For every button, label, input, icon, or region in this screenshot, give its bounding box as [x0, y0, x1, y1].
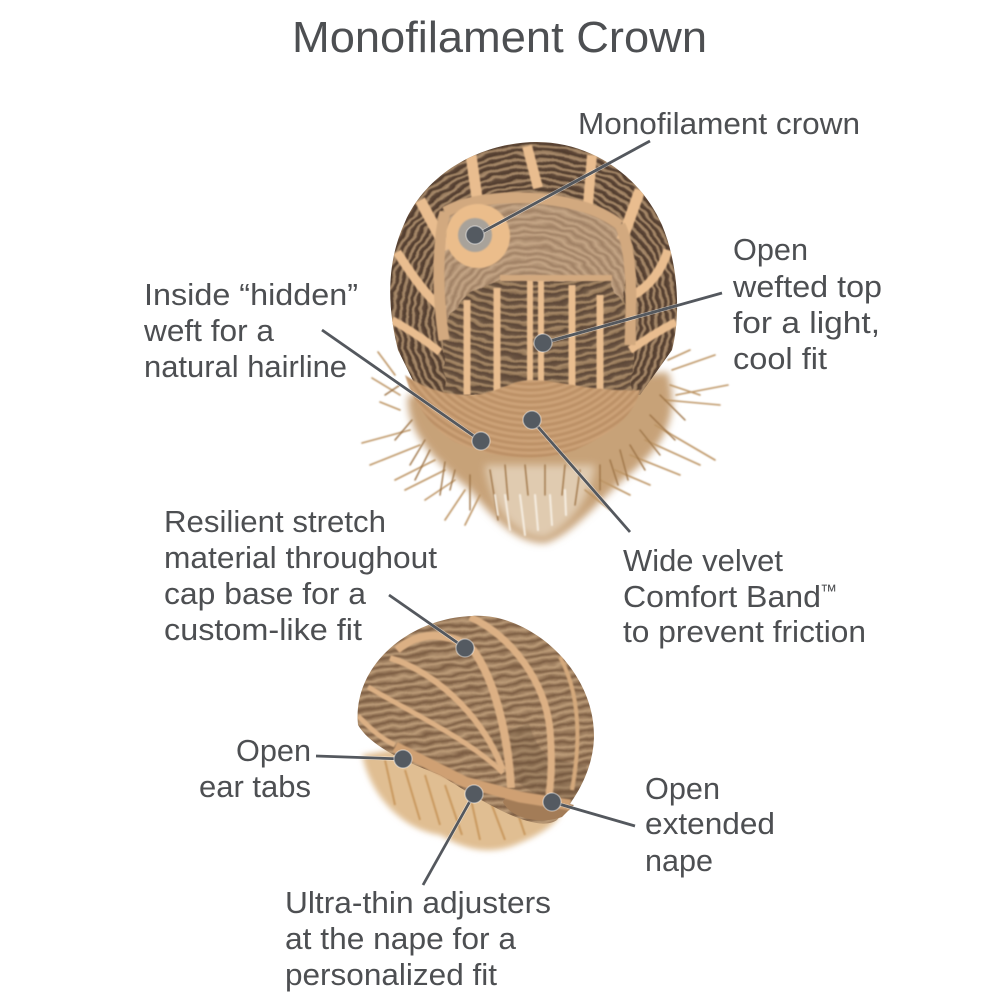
nape band — [395, 747, 570, 805]
label: extended nape: nape — [645, 844, 713, 878]
straps: upper wig — [392, 146, 676, 395]
label: comfort band: to prevent friction — [623, 615, 866, 649]
label: open wefted top: Open — [733, 233, 808, 267]
label: open wefted top: for a light, — [733, 306, 880, 340]
title: Monofilament Crown — [292, 13, 707, 62]
label: stretch material: material throughout — [164, 541, 438, 575]
wig: back view — [348, 606, 604, 850]
label: stretch material — [164, 505, 438, 647]
cap wefts: lower wig — [358, 616, 594, 824]
label: open wefted top — [732, 233, 882, 376]
comfort band — [405, 375, 640, 458]
crown lace panel — [436, 196, 629, 335]
label: ear tabs: Open — [236, 734, 311, 768]
label: adjusters: Ultra-thin adjusters — [285, 886, 551, 920]
label: extended nape: extended — [645, 807, 775, 841]
label: comfort band: Wide velvet — [623, 544, 784, 578]
leader: ear tabs — [316, 750, 412, 768]
open wefted panel — [443, 280, 632, 395]
leader: monofilament crown — [466, 141, 650, 244]
label: hidden weft: natural hairline — [144, 350, 347, 384]
label: open wefted top: cool fit — [733, 342, 828, 376]
leader: extended nape — [543, 793, 635, 826]
label: comfort band: Comfort Band — [623, 580, 821, 614]
label: hidden weft: weft for a — [143, 314, 274, 348]
label: stretch material: cap base for a — [164, 577, 366, 611]
label: hidden weft — [143, 278, 358, 384]
label: ear tabs — [199, 734, 311, 804]
leader: hidden weft — [322, 330, 490, 450]
label: comfort band: ™ — [820, 581, 837, 601]
straps: lower wig — [358, 617, 585, 795]
label: adjusters — [285, 886, 551, 992]
leader: adjusters — [423, 785, 483, 885]
label: comfort band — [623, 544, 866, 649]
hair fringe: upper wig — [362, 350, 728, 543]
label: stretch material: Resilient stretch — [164, 505, 386, 539]
label: monofilament crown: Monofilament crown — [578, 107, 860, 141]
leader: comfort band — [523, 411, 630, 532]
monofilament circle — [446, 204, 510, 268]
label: adjusters: at the nape for a — [285, 922, 516, 956]
leader: stretch material — [389, 595, 474, 657]
label: stretch material: custom-like fit — [164, 613, 363, 647]
blonde hair: lower wig — [362, 745, 560, 850]
label: open wefted top: wefted top — [732, 270, 882, 304]
wig: inside front view — [362, 130, 728, 543]
leader: open wefted top — [534, 293, 722, 352]
nape bump — [503, 790, 574, 820]
label: hidden weft: Inside “hidden” — [144, 278, 358, 312]
label: extended nape: Open — [645, 772, 720, 806]
label: ear tabs: ear tabs — [199, 770, 311, 804]
label: adjusters: personalized fit — [285, 958, 498, 992]
cap wefts: upper wig — [390, 142, 678, 395]
label: extended nape — [645, 772, 775, 878]
